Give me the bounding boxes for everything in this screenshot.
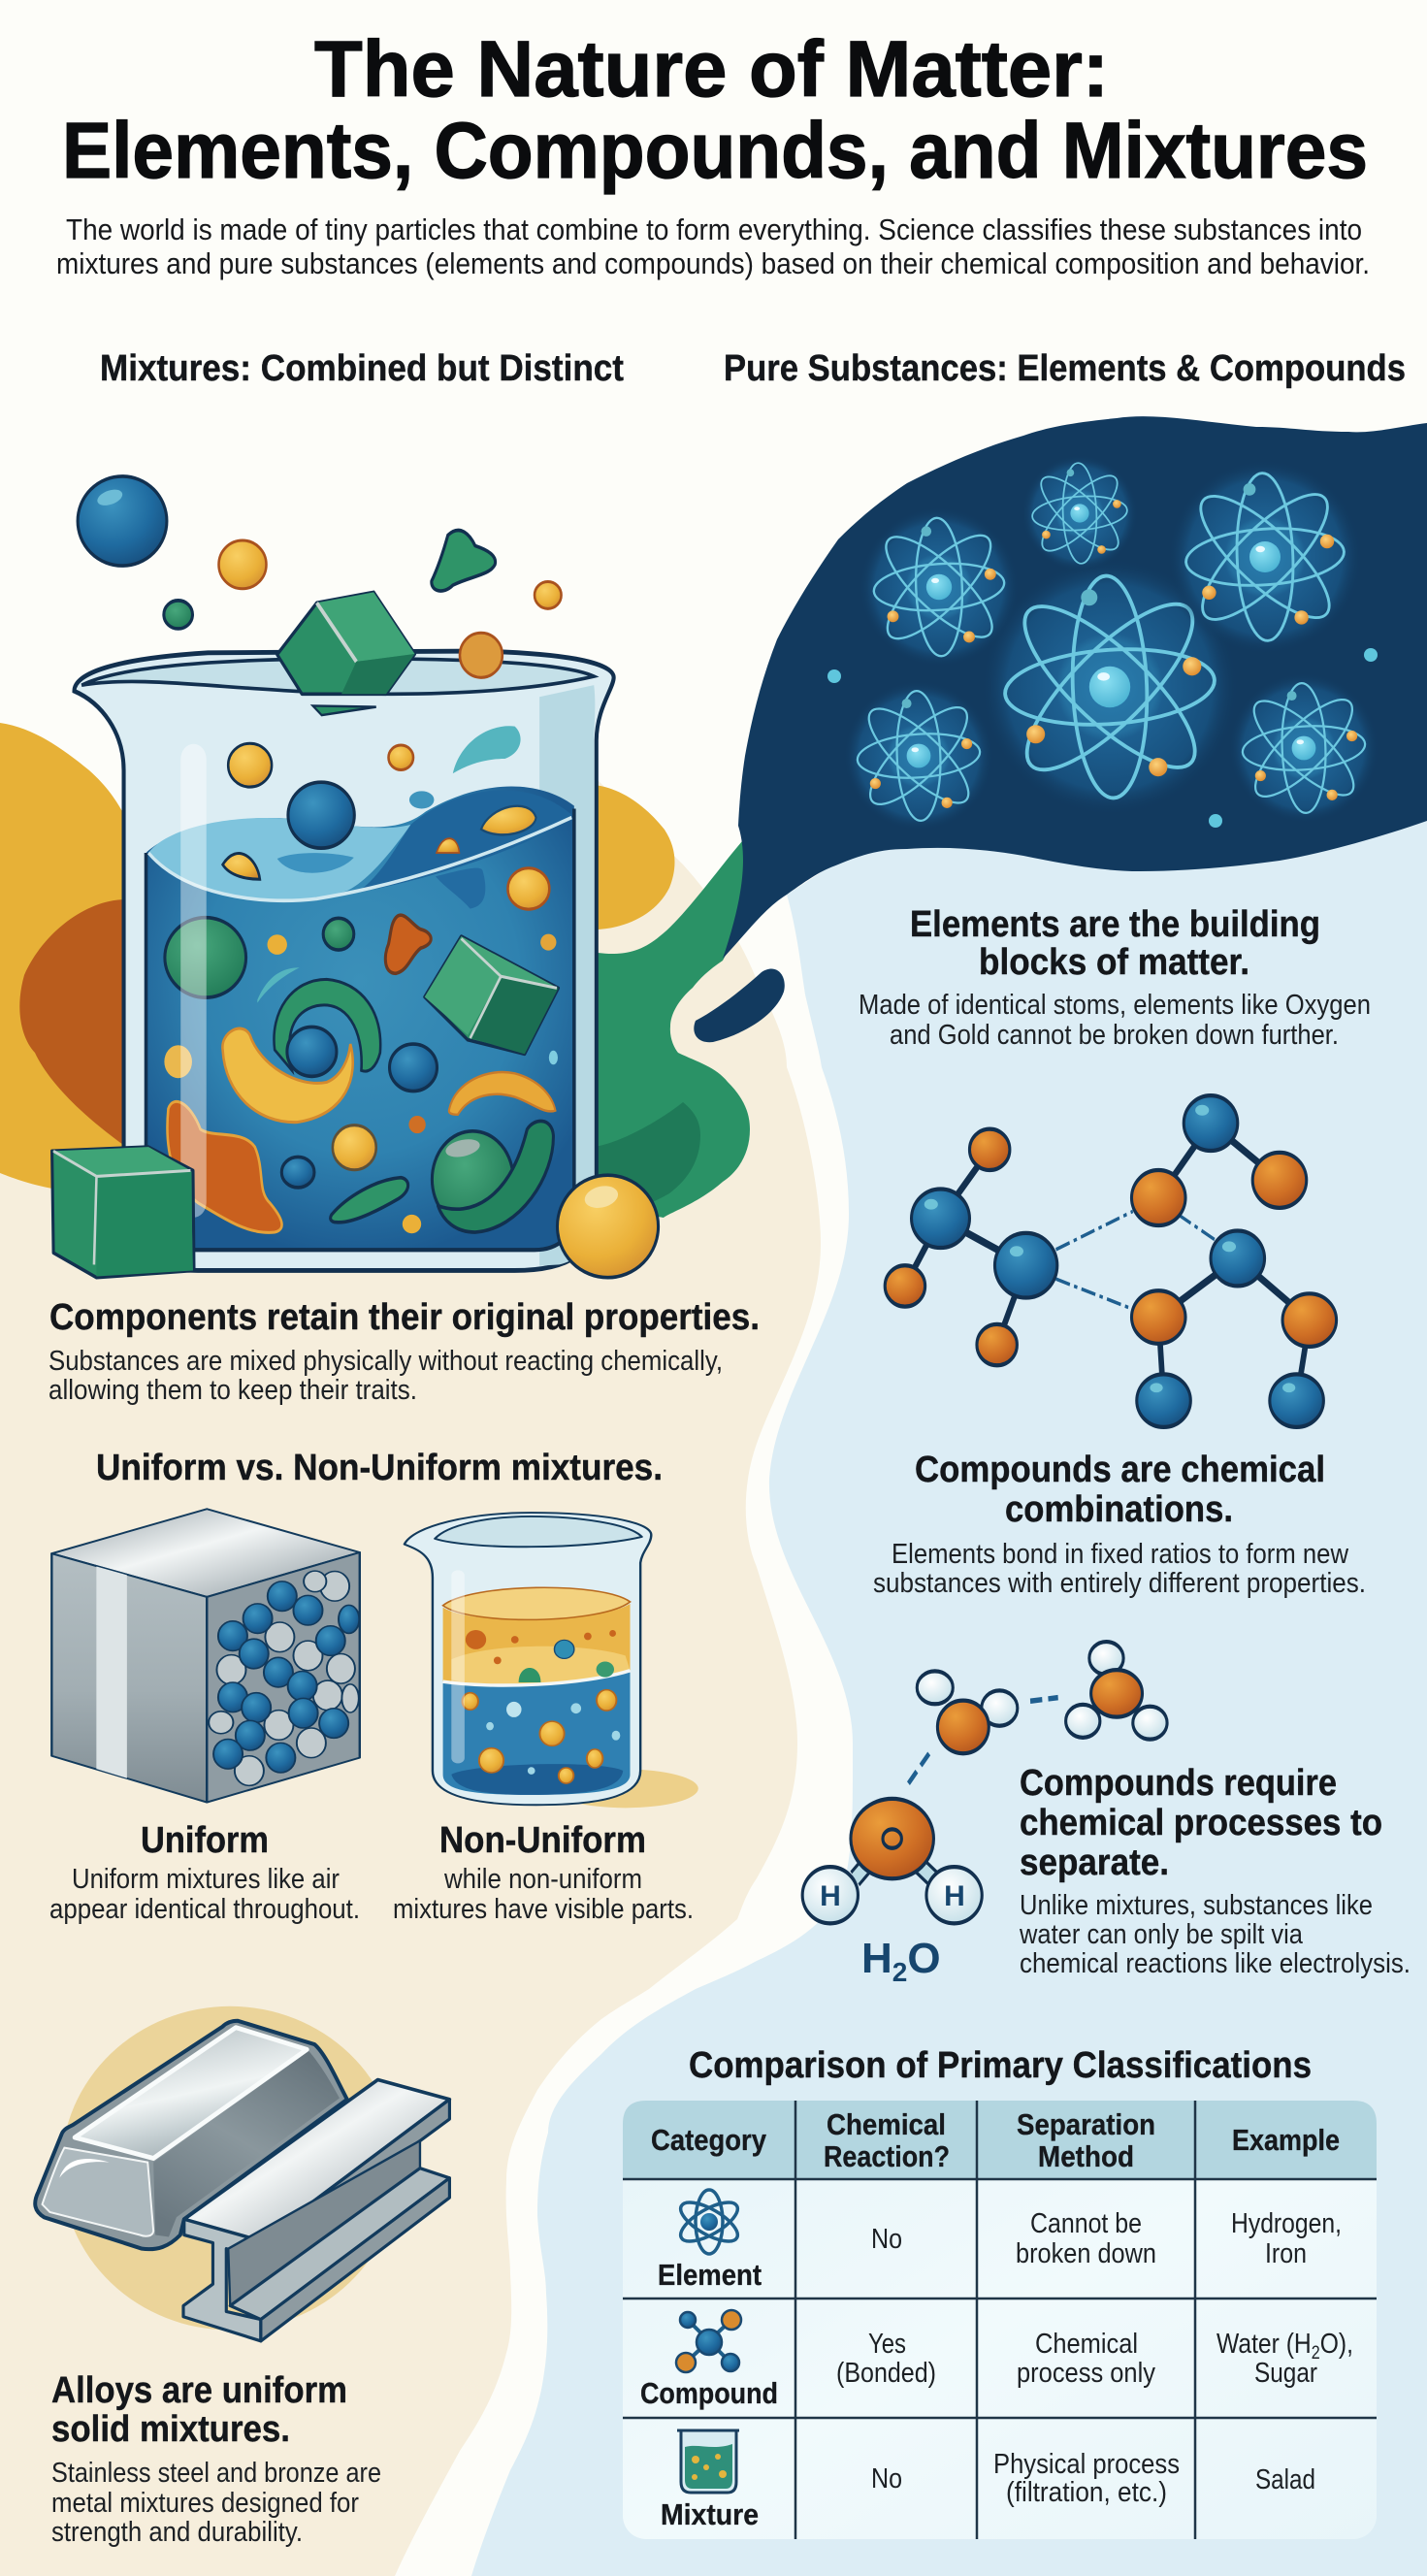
table row: compound: Chemical (1035, 2329, 1138, 2360)
panel: dark atom blob (723, 416, 1427, 959)
ingot body (35, 2021, 347, 2249)
text block: compounds are chemical: substances with entirely different properties. (873, 1568, 1366, 1599)
text block: compounds require chemical processes: water can only be spilt via (1019, 1919, 1303, 1950)
text block: non-uniform (393, 1820, 694, 1925)
beaker rim (81, 659, 594, 694)
floating small gold sphere (535, 581, 562, 608)
label: water hydrogen atoms: H (944, 1880, 965, 1912)
table row: compound: (Bonded) (836, 2358, 936, 2389)
text block: alloys: solid mixtures. (51, 2409, 290, 2450)
orange ball on rim (460, 633, 503, 677)
table row: mixture: Mixture (661, 2497, 759, 2531)
text block: uniform: Uniform (141, 1820, 269, 1861)
text block: compounds require chemical processes: Unlike mixtures, substances like (1020, 1890, 1373, 1921)
panel: mixtures cream background (0, 776, 821, 2576)
text block: compounds are chemical: combinations. (1005, 1489, 1233, 1530)
table row: element (658, 2190, 1342, 2292)
heading: comparison table: Comparison of Primary Classifications (689, 2045, 1312, 2086)
text block: compounds require chemical processes: separate. (1020, 1842, 1169, 1883)
heading: mixtures: Mixtures: Combined but Distinct (100, 348, 624, 389)
text block: alloys (51, 2370, 381, 2548)
text block: compounds require chemical processes (1019, 1763, 1411, 1979)
title: The Nature of Matter: (314, 25, 1109, 114)
glass highlight strip (180, 744, 207, 1218)
table row: mixture: Salad (1255, 2464, 1315, 2495)
table row: compound: Sugar (1254, 2358, 1317, 2389)
label: H2O formula: 2 (892, 1957, 907, 1987)
text block: components retain properties: Components retain their original properties. (49, 1297, 760, 1338)
label: water hydrogen atoms (820, 1880, 965, 1912)
liquid surface light (148, 818, 410, 899)
green cube on rim (277, 592, 415, 715)
table row: mixture (661, 2430, 1315, 2531)
text block: alloys: Stainless steel and bronze are (51, 2458, 381, 2489)
icon: atom centre (982, 559, 1238, 815)
text block: components retain properties: allowing them to keep their traits. (49, 1375, 417, 1406)
table row: element: Iron (1265, 2238, 1307, 2269)
table header row: Chemical (827, 2107, 946, 2141)
text block: non-uniform: while non-uniform (443, 1864, 642, 1895)
text block: compounds require chemical processes: chemical processes to (1020, 1803, 1382, 1843)
text block: alloys: strength and durability. (51, 2517, 303, 2548)
text block: uniform: appear identical throughout. (49, 1894, 360, 1925)
heading: uniform vs non-uniform: Uniform vs. Non-Uniform mixtures. (96, 1448, 663, 1488)
green spheres (165, 918, 354, 997)
title: Elements, Compounds, and Mixtures (62, 107, 1368, 195)
text block: elements: and Gold cannot be broken down further. (890, 1020, 1339, 1051)
table header row (651, 2107, 1340, 2173)
text block: components retain properties: Substances are mixed physically without reacting chemically, (49, 1346, 723, 1377)
blue sphere at surface (288, 782, 354, 848)
text block: elements: blocks of matter. (979, 942, 1249, 983)
table row: compound: process only (1017, 2358, 1155, 2389)
text block: non-uniform: mixtures have visible parts. (393, 1894, 694, 1925)
beaker glass (75, 651, 614, 1270)
icon: atom left (859, 506, 1019, 668)
table header row: Separation (1017, 2107, 1155, 2141)
table row: element: Cannot be (1030, 2208, 1142, 2239)
table row: compound: Compound (640, 2376, 778, 2410)
label: water hydrogen atoms: H (820, 1880, 841, 1912)
illustration: uniform metal cube (51, 1509, 360, 1803)
text block: uniform (49, 1820, 360, 1925)
text block: non-uniform: Non-Uniform (439, 1820, 646, 1861)
table row: compound: 2 (1312, 2343, 1320, 2364)
table row: compound: O), (1320, 2329, 1353, 2360)
text block: compounds require chemical processes: Compounds require (1020, 1763, 1337, 1804)
illustration: water molecules (802, 1642, 1167, 1923)
decorative blobs behind beaker (0, 723, 750, 1218)
title (62, 25, 1368, 195)
table row: mixture: No (871, 2463, 902, 2494)
table row: element: No (871, 2224, 902, 2255)
icon: atom lower right (1228, 673, 1379, 823)
text block: uniform: Uniform mixtures like air (72, 1864, 340, 1895)
table row: element: Hydrogen, (1231, 2208, 1342, 2239)
floating gold sphere (219, 540, 266, 589)
gold arc right (449, 1072, 555, 1115)
icon: atom top (1022, 455, 1138, 571)
table header row: Reaction? (824, 2139, 950, 2173)
beam top flange (184, 2080, 449, 2241)
text block: compounds are chemical: Compounds are chemical (915, 1450, 1325, 1490)
text block: components retain properties (49, 1297, 760, 1406)
text block: compounds are chemical: Elements bond in fixed ratios to form new (892, 1539, 1348, 1570)
illustration: alloys ingot and beam (35, 2006, 449, 2341)
table header row: Method (1038, 2139, 1134, 2173)
gold and teal particles (164, 726, 558, 1233)
table header row: Category (651, 2123, 767, 2157)
table row: element: Element (658, 2258, 762, 2292)
illustration: large beaker with mixture (52, 476, 659, 1278)
table header row: Example (1232, 2123, 1340, 2157)
icon: atom lower left (844, 681, 993, 831)
gold sphere bottom-right (557, 1175, 659, 1278)
beaker right band (539, 685, 595, 1266)
text block: compounds are chemical (873, 1450, 1366, 1599)
swirl (222, 967, 438, 1123)
floating blue sphere (78, 476, 167, 566)
ingot side face (153, 2051, 340, 2237)
ingot top face (75, 2028, 307, 2159)
floating green sphere (164, 601, 192, 629)
orange shape lower left (167, 1101, 282, 1232)
table: primary classifications (623, 2101, 1377, 2539)
table row: compound: Water (H (1216, 2329, 1328, 2360)
liquid (146, 787, 574, 1250)
text block: elements: Elements are the building (910, 904, 1320, 945)
label: H2O formula: O (907, 1935, 941, 1982)
table row: element: broken down (1016, 2238, 1156, 2269)
text block: alloys: Alloys are uniform (51, 2370, 347, 2411)
orange blob (385, 915, 431, 973)
icon: dark droplet (694, 969, 785, 1042)
ingot front face (42, 2148, 153, 2236)
liquid surface dark (356, 790, 571, 893)
intro text (56, 212, 1370, 280)
green cube bottom-left (52, 1147, 194, 1278)
table row: compound: Yes (868, 2329, 906, 2360)
floating green blob (432, 531, 496, 591)
label: H2O formula: H (861, 1935, 892, 1982)
table row: mixture: (filtration, etc.) (1006, 2477, 1167, 2508)
text block: elements: Made of identical stoms, elements like Oxygen (859, 990, 1371, 1021)
icon: atom right (1168, 460, 1362, 654)
table row: mixture: Physical process (993, 2449, 1180, 2480)
illustration: non-uniform beaker (405, 1513, 698, 1808)
illustration: compound molecule network (885, 1095, 1337, 1427)
green cube in liquid (425, 936, 559, 1054)
text block: elements (859, 904, 1371, 1051)
lower particles (281, 1121, 553, 1232)
panel: pure substances blue background (471, 776, 1427, 2576)
text block: alloys: metal mixtures designed for (51, 2488, 359, 2519)
table row: compound (640, 2310, 1353, 2410)
